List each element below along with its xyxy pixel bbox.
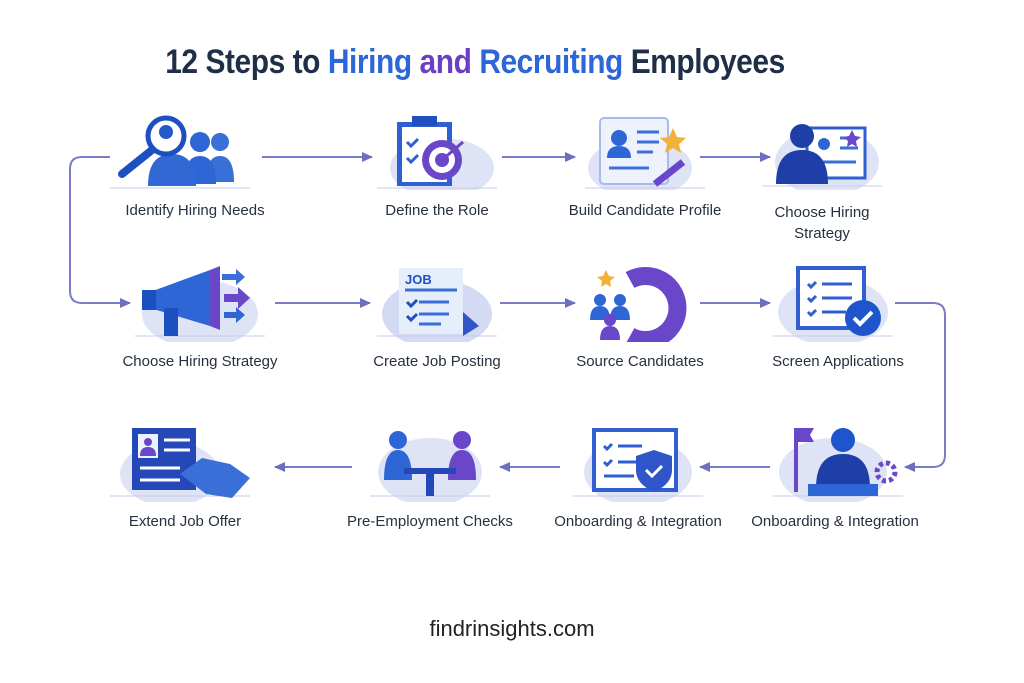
- label: Define the Role: [385, 202, 489, 219]
- icon: onboarding shield: [573, 428, 703, 502]
- icon: choose hiring strategy: [762, 124, 882, 190]
- label: Choose Hiring: [774, 204, 870, 221]
- label: Strategy: [794, 225, 850, 242]
- label: Source Candidates: [576, 353, 704, 370]
- icon: job offer: [110, 428, 250, 502]
- icon: define the role: [377, 116, 497, 190]
- label: Identify Hiring Needs: [125, 202, 265, 219]
- title: 12 Steps to Hiring and Recruiting Employees: [165, 43, 785, 81]
- icon: screen applications: [773, 266, 893, 342]
- icon: build candidate profile: [585, 117, 705, 190]
- label: Build Candidate Profile: [569, 202, 721, 219]
- icon: onboarding leader: [773, 428, 903, 502]
- icon: identify hiring needs: [110, 116, 250, 188]
- label: Create Job Posting: [373, 353, 501, 370]
- label: Extend Job Offer: [129, 513, 241, 530]
- label: Pre-Employment Checks: [347, 513, 513, 530]
- icon: pre-employment checks: [370, 431, 490, 502]
- icon: job posting: JOB: [405, 272, 432, 287]
- label: [774, 204, 870, 242]
- label: Screen Applications: [772, 353, 904, 370]
- footer: findrinsights.com: [429, 616, 595, 641]
- icon: job posting: [377, 268, 497, 342]
- label: Choose Hiring Strategy: [122, 353, 278, 370]
- label: Onboarding & Integration: [554, 513, 722, 530]
- label: Onboarding & Integration: [751, 513, 919, 530]
- icon: megaphone: [135, 266, 265, 342]
- icon: source candidates: [590, 267, 686, 342]
